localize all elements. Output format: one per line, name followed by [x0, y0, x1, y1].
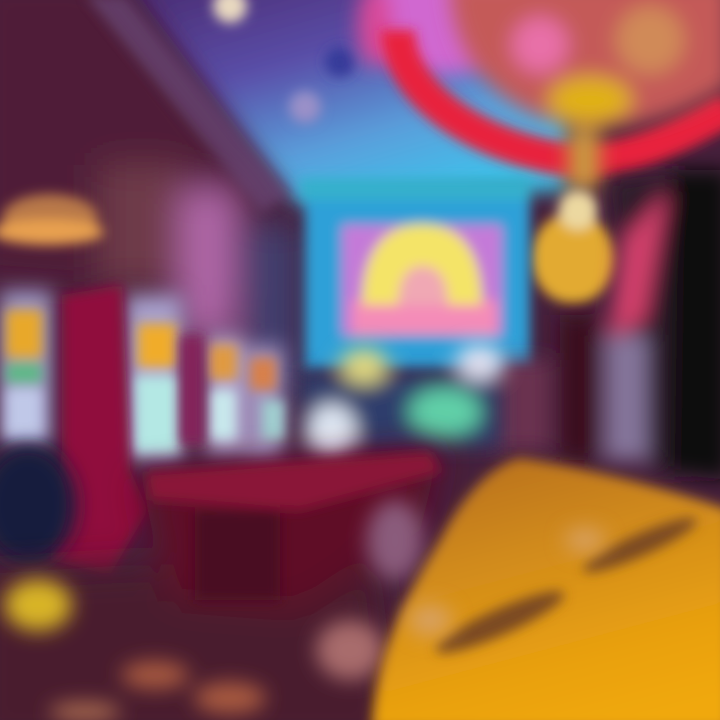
left wall: [0, 0, 300, 395]
screen: [300, 178, 530, 370]
carpet and table base: [0, 450, 440, 720]
table markings: [431, 510, 701, 662]
red table: [145, 452, 442, 600]
ceiling: [115, 0, 570, 205]
ceiling lights: [213, 0, 355, 123]
ceiling beam: [85, 0, 290, 212]
pink halo: [357, 0, 520, 75]
lower room band: [300, 344, 504, 460]
yellow table: [372, 458, 720, 720]
hanging balloon: [531, 190, 615, 304]
right dark column: [495, 170, 720, 480]
slot machines: [0, 290, 283, 460]
red column: [50, 285, 204, 575]
hat-shaped lamp: [0, 194, 104, 245]
dark seat: [0, 445, 76, 565]
chandelier body: [450, 0, 720, 190]
slot machine screens: [6, 310, 284, 452]
red ring: [398, 30, 720, 160]
chandelier: [357, 0, 720, 304]
carpet highlights: [4, 500, 423, 720]
